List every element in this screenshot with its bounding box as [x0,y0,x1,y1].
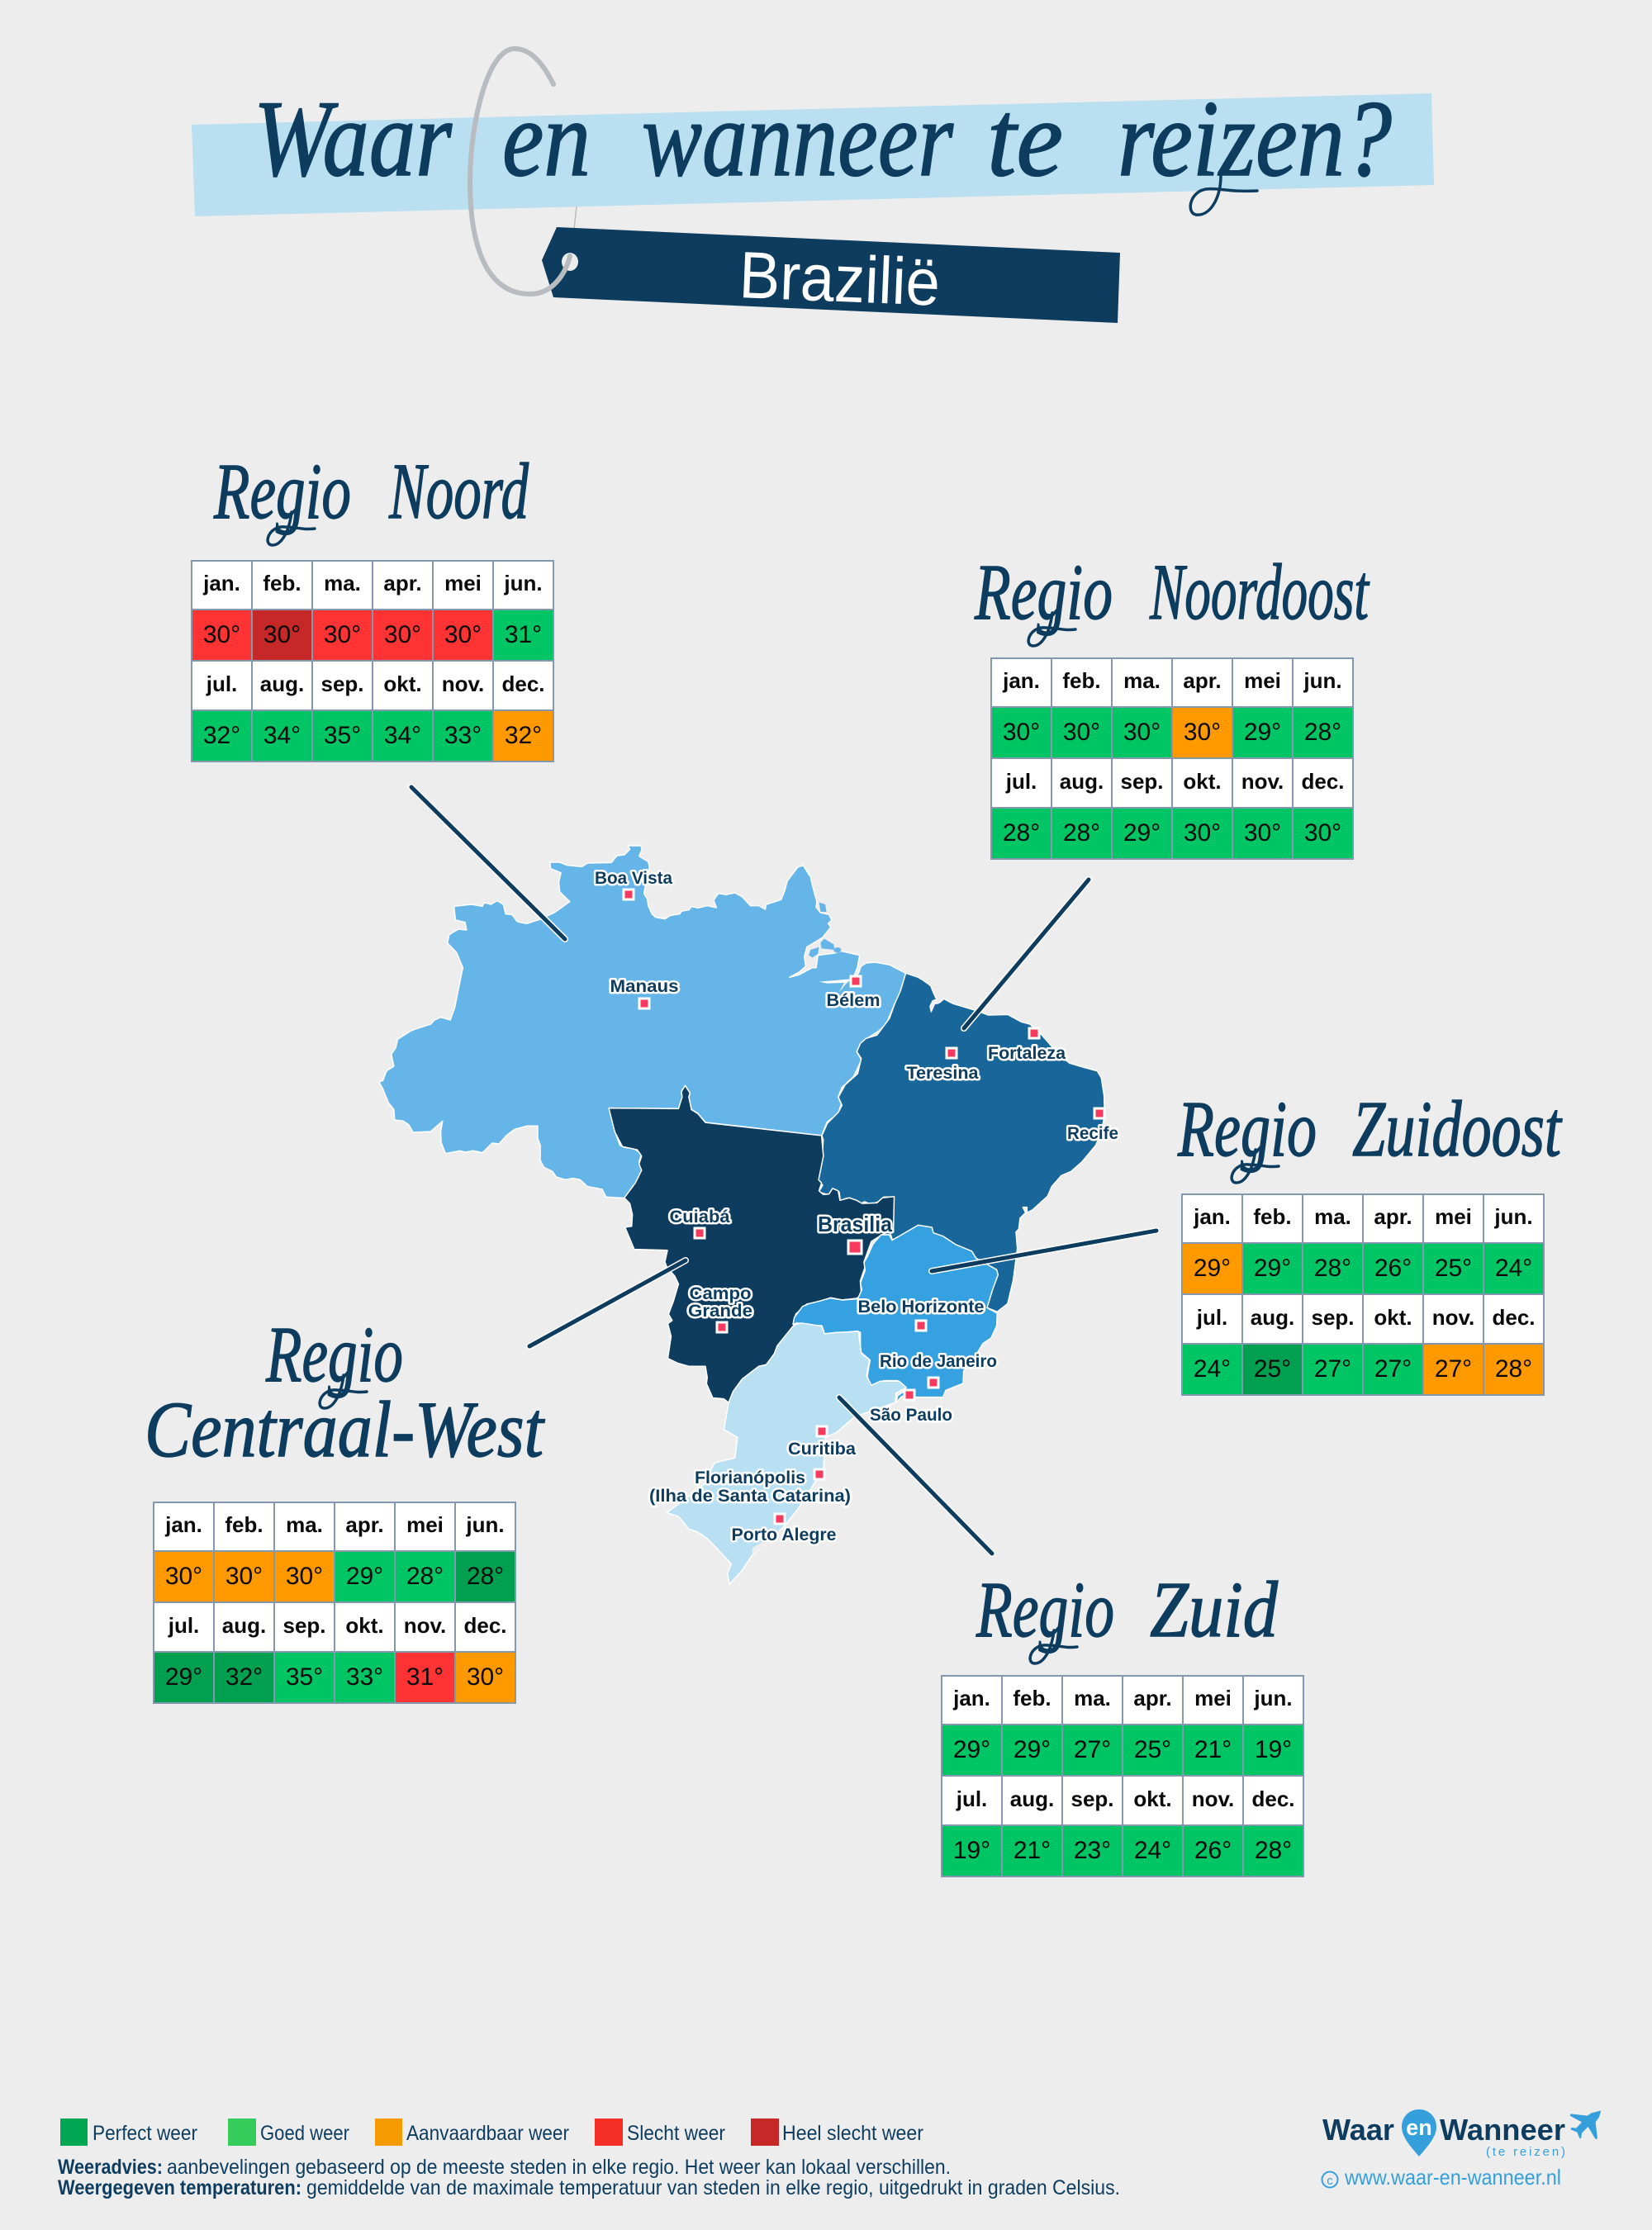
city: Cuiabá [669,1208,730,1238]
city: Curitiba [788,1426,856,1459]
table: Regio Noord: feb. [263,571,301,595]
city: Campo Grande: Campo [689,1284,752,1303]
heading: Regio Zuidoost: Zuidoost [1352,1084,1563,1173]
table: Regio Noordoost: jan. [1003,668,1040,693]
heading: Regio Noordoost [974,548,1370,646]
table: Regio Centraal-West: okt. [345,1613,384,1638]
legend item: Slecht weer [595,2118,725,2146]
connector: Regio Noord [411,787,565,939]
table: Regio Noord: 30° [263,621,301,648]
city: Boa Vista: Boa Vista [595,869,672,888]
table: Regio Noord: nov. [442,671,484,696]
table: Regio Zuid: 29° [1014,1736,1051,1763]
table: Regio Zuidoost: nov. [1432,1305,1474,1330]
table: Regio Zuid: 24° [1134,1837,1171,1864]
heading: Regio Noordoost: Regio [974,548,1113,636]
table: Regio Centraal-West: jul. [169,1613,199,1638]
table: Regio Zuid: dec. [1251,1786,1295,1811]
table: Regio Noordoost: 28° [1063,819,1100,847]
city: Florianópolis: (Ilha de Santa Catarina) [649,1487,851,1506]
table: Regio Noordoost: feb. [1062,668,1101,693]
table: Regio Zuidoost: 25° [1435,1255,1472,1282]
legend item: Perfect weer: Perfect weer [93,2122,197,2145]
table: Regio Centraal-West: feb. [225,1512,263,1537]
city: São Paulo: São Paulo [870,1406,952,1425]
table: Regio Noordoost: 30° [1184,719,1221,746]
legend item: Goed weer: Goed weer [260,2122,349,2145]
table: Regio Noord: mei [444,571,482,595]
table: Regio Noordoost: dec. [1301,769,1345,794]
table: Regio Zuidoost: apr. [1374,1204,1412,1229]
table: Regio Noord: 32° [505,722,542,749]
table: Regio Noordoost: nov. [1241,769,1284,794]
table: Regio Noordoost [990,657,1354,860]
heading: Regio Noord: Noord [388,447,529,535]
table: Regio Noordoost: mei [1244,668,1281,693]
region: Noordoost [818,973,1104,1312]
table: Regio Zuidoost: 29° [1254,1255,1291,1282]
table: Regio Zuidoost: 24° [1194,1355,1231,1383]
table: Regio Zuidoost: mei [1435,1204,1472,1229]
table: Regio Zuidoost [1181,1193,1545,1396]
table: Regio Noordoost: jun. [1303,668,1342,693]
table: Regio Zuid: jun. [1254,1686,1293,1710]
table: Regio Noordoost: 30° [1184,819,1221,847]
table: Regio Zuid: feb. [1013,1686,1051,1710]
table: Regio Noord [191,560,554,762]
table: Regio Zuidoost: 28° [1495,1355,1532,1383]
table: Regio Noordoost: 30° [1003,719,1040,746]
title [254,78,1392,215]
table: Regio Noordoost: 30° [1063,719,1100,746]
table: Regio Centraal-West: jan. [165,1512,202,1537]
table: Regio Noord: aug. [260,671,304,696]
city: Porto Alegre: Porto Alegre [732,1525,836,1544]
table: Regio Zuidoost: jan. [1194,1204,1231,1229]
logo: Waar en Wanneer: Wanneer [1440,2113,1565,2147]
table: Regio Centraal-West: 30° [225,1563,263,1590]
table: Regio Centraal-West: 28° [406,1563,444,1590]
table: Regio Zuid: jul. [957,1786,987,1811]
icon: location pin [1402,2109,1436,2156]
city: Brasilia [818,1212,893,1254]
table: Regio Centraal-West: 28° [467,1563,504,1590]
city: Belo Horizonte: Belo Horizonte [857,1298,985,1317]
city: Manaus: Manaus [610,977,679,996]
city: Florianópolis [649,1468,851,1506]
table: Regio Noord: 31° [505,621,542,648]
table: Regio Zuid: sep. [1070,1786,1114,1811]
region: Zuidoost [793,1225,998,1402]
table: Regio Zuidoost: feb. [1253,1204,1292,1229]
table: Regio Zuidoost: 27° [1374,1355,1412,1383]
title: te [987,78,1063,199]
table: Regio Zuid: apr. [1133,1686,1172,1710]
table: Regio Zuidoost: 25° [1254,1355,1291,1383]
city: Campo Grande [688,1284,752,1332]
table: Regio Noord: apr. [383,571,422,595]
table: Regio Centraal-West: mei [406,1512,444,1537]
table: Regio Centraal-West: ma. [286,1512,323,1537]
table: Regio Zuid: 23° [1074,1837,1111,1864]
table: Regio Noord: 34° [263,722,301,749]
map of Brazil [379,787,1156,1584]
table: Regio Noord: jun. [504,571,543,595]
table: Regio Zuid: 21° [1194,1736,1232,1763]
table: Regio Zuid [941,1675,1304,1877]
table: Regio Centraal-West: 29° [346,1563,383,1590]
table: Regio Noordoost: okt. [1183,769,1222,794]
table: Regio Centraal-West: 30° [467,1663,504,1691]
table: Regio Noord: 30° [384,621,421,648]
heading: Regio Zuidoost: Regio [1177,1084,1317,1173]
heading: Regio Zuid [976,1565,1279,1663]
table: Regio Centraal-West: 30° [165,1563,202,1590]
table: Regio Zuid: nov. [1192,1786,1234,1811]
connector: Regio Centraal-West [529,1260,686,1346]
heading: Regio Noord: Regio [213,447,351,535]
note: Weergegeven temperaturen: gemiddelde van de maximale temperatuur van steden in elke regio, uitgedrukt in graden Celsius. [306,2176,1120,2199]
table: Regio Centraal-West: 32° [225,1663,263,1691]
table: Regio Noord: dec. [501,671,545,696]
table: Regio Zuid: 19° [953,1837,990,1864]
table: Regio Zuidoost: ma. [1314,1204,1351,1229]
table: Regio Noord: 34° [384,722,421,749]
table: Regio Centraal-West: 30° [286,1563,323,1590]
heading: Regio Centraal-West: Centraal-West [145,1385,545,1473]
website link: www.waar-en-wanneer.nl [1344,2165,1561,2190]
heading: Regio Zuid: Zuid [1150,1565,1279,1654]
city: Rio de Janeiro: Rio de Janeiro [880,1352,997,1371]
table: Regio Noordoost: apr. [1183,668,1222,693]
table: Regio Noordoost: 30° [1244,819,1281,847]
legend item: Heel slecht weer [751,2118,923,2146]
table: Regio Centraal-West: 29° [165,1663,202,1691]
logo: Waar en Wanneer: Waar [1322,2113,1394,2147]
table: Regio Noordoost: sep. [1120,769,1164,794]
city: São Paulo [870,1390,952,1425]
table: Regio Zuidoost: aug. [1251,1305,1294,1330]
city: Campo Grande: Grande [688,1302,752,1321]
table: Regio Zuidoost: 24° [1495,1255,1532,1282]
legend item: Heel slecht weer: Heel slecht weer [782,2122,923,2145]
logo: Waar en Wanneer: (te reizen) [1486,2145,1565,2159]
table: Regio Zuidoost: 29° [1194,1255,1231,1282]
table: Regio Zuid: 26° [1194,1837,1232,1864]
table: Regio Centraal-West: 35° [286,1663,323,1691]
table: Regio Noord: ma. [324,571,361,595]
table: Regio Noordoost: 29° [1244,719,1281,746]
region: Noord [379,846,905,1198]
city: Bélem: Bélem [826,991,881,1010]
table: Regio Noordoost: 30° [1123,719,1161,746]
table: Regio Zuid: jan. [953,1686,990,1710]
table: Regio Zuidoost: jul. [1197,1305,1227,1330]
table: Regio Noord: 30° [203,621,240,648]
table: Regio Noord: 30° [444,621,482,648]
city: Bélem [826,976,881,1010]
website link: c [1327,2174,1333,2188]
table: Regio Noordoost: 29° [1123,819,1161,847]
connector: Regio Zuid [839,1397,992,1554]
title band [192,93,1434,216]
table: Regio Zuid: 19° [1255,1736,1292,1763]
city: Porto Alegre [732,1514,836,1544]
connector: Regio Zuidoost [932,1231,1156,1271]
city: Fortaleza: Fortaleza [988,1044,1066,1063]
table: Regio Noordoost: aug. [1060,769,1104,794]
table: Regio Centraal-West: 31° [406,1663,444,1691]
legend item: Perfect weer [60,2118,197,2146]
table: Regio Zuid: okt. [1133,1786,1172,1811]
table: Regio Noord: 35° [324,722,361,749]
region: Centraal-West [609,1085,895,1402]
table: Regio Noordoost: jul. [1006,769,1037,794]
city: Belo Horizonte [857,1298,985,1331]
city: Teresina: Teresina [907,1064,979,1083]
table: Regio Noord: jan. [203,571,240,595]
city: Boa Vista [595,869,672,899]
table: Regio Noordoost: ma. [1123,668,1161,693]
table: Regio Zuid: 28° [1255,1837,1292,1864]
table: Regio Zuid: ma. [1074,1686,1111,1710]
heading: Regio Zuidoost [1177,1084,1563,1183]
table: Regio Noord: sep. [320,671,364,696]
table: Regio Centraal-West: apr. [345,1512,384,1537]
heading: Regio Noord [213,447,529,545]
table: Regio Zuid: 21° [1014,1837,1051,1864]
table: Regio Zuidoost: sep. [1311,1305,1355,1330]
table: Regio Zuidoost: 27° [1435,1355,1472,1383]
city: Manaus [610,977,679,1008]
table: Regio Zuidoost: okt. [1374,1305,1412,1330]
table: Regio Zuid: mei [1194,1686,1232,1710]
city: Florianópolis: Florianópolis [695,1468,805,1487]
city: Curitiba: Curitiba [788,1440,856,1459]
table: Regio Zuidoost: jun. [1494,1204,1533,1229]
table: Regio Centraal-West: nov. [404,1613,446,1638]
title: reizen? [1118,78,1392,199]
heading: Regio Noordoost: Noordoost [1149,548,1370,636]
table: Regio Noord: okt. [383,671,422,696]
tag: Brazilië [542,227,1120,323]
logo: Waar en Wanneer [1322,2109,1601,2159]
table: Regio Zuid: 25° [1134,1736,1171,1763]
table: Regio Centraal-West: 33° [346,1663,383,1691]
table: Regio Noordoost: 30° [1304,819,1341,847]
table: Regio Zuidoost: 26° [1374,1255,1412,1282]
table: Regio Centraal-West: jun. [466,1512,505,1537]
legend [60,2118,923,2146]
note: Weeradvies: aanbevelingen gebaseerd op de meeste steden in elke regio. Het weer kan lokaal verschillen. [167,2156,951,2179]
heading: Regio Centraal-West [145,1310,545,1473]
legend item: Goed weer [228,2118,349,2146]
title: wanneer [642,78,954,199]
table: Regio Zuidoost: 28° [1314,1255,1351,1282]
table: Regio Noordoost: 28° [1003,819,1040,847]
logo: Waar en Wanneer: en [1406,2115,1432,2140]
city: Cuiabá: Cuiabá [669,1208,730,1226]
note: Weergegeven temperaturen: Weergegeven temperaturen: [58,2176,301,2199]
tag: Brazilië: Brazilië [738,238,942,320]
title: Waar [254,78,453,199]
heading: Regio Centraal-West: Regio [265,1310,403,1398]
region: Zuid [667,1323,906,1584]
table: Regio Zuid: 29° [953,1736,990,1763]
connector: Regio Noordoost [964,880,1089,1028]
legend item: Aanvaardbaar weer [375,2118,569,2146]
table: Regio Centraal-West: aug. [222,1613,266,1638]
city: Teresina [907,1048,979,1083]
table: Regio Centraal-West [153,1502,516,1704]
city: Brasilia: Brasilia [818,1212,893,1236]
table: Regio Noordoost: 28° [1304,719,1341,746]
table: Regio Centraal-West: sep. [282,1613,326,1638]
city: Recife: Recife [1067,1124,1118,1143]
table: Regio Zuidoost: 27° [1314,1355,1351,1383]
table: Regio Noord: jul. [206,671,237,696]
table: Regio Zuid: 27° [1074,1736,1111,1763]
city: Fortaleza [988,1028,1066,1063]
legend item: Slecht weer: Slecht weer [627,2122,725,2145]
table: Regio Noord: 33° [444,722,482,749]
note: Weeradvies: Weeradvies: [58,2156,163,2179]
legend item: Aanvaardbaar weer: Aanvaardbaar weer [406,2122,569,2145]
tag string loop [470,49,570,294]
city: Rio de Janeiro [880,1352,997,1388]
heading: Regio Zuid: Regio [976,1565,1114,1654]
title: en [502,78,591,199]
hanging tag string [574,206,577,229]
table: Regio Zuid: aug. [1010,1786,1054,1811]
table: Regio Zuidoost: dec. [1492,1305,1536,1330]
table: Regio Centraal-West: dec. [463,1613,507,1638]
city: Recife [1067,1108,1118,1143]
table: Regio Noord: 30° [324,621,361,648]
table: Regio Noord: 32° [203,722,240,749]
icon: airplane [1570,2110,1601,2139]
